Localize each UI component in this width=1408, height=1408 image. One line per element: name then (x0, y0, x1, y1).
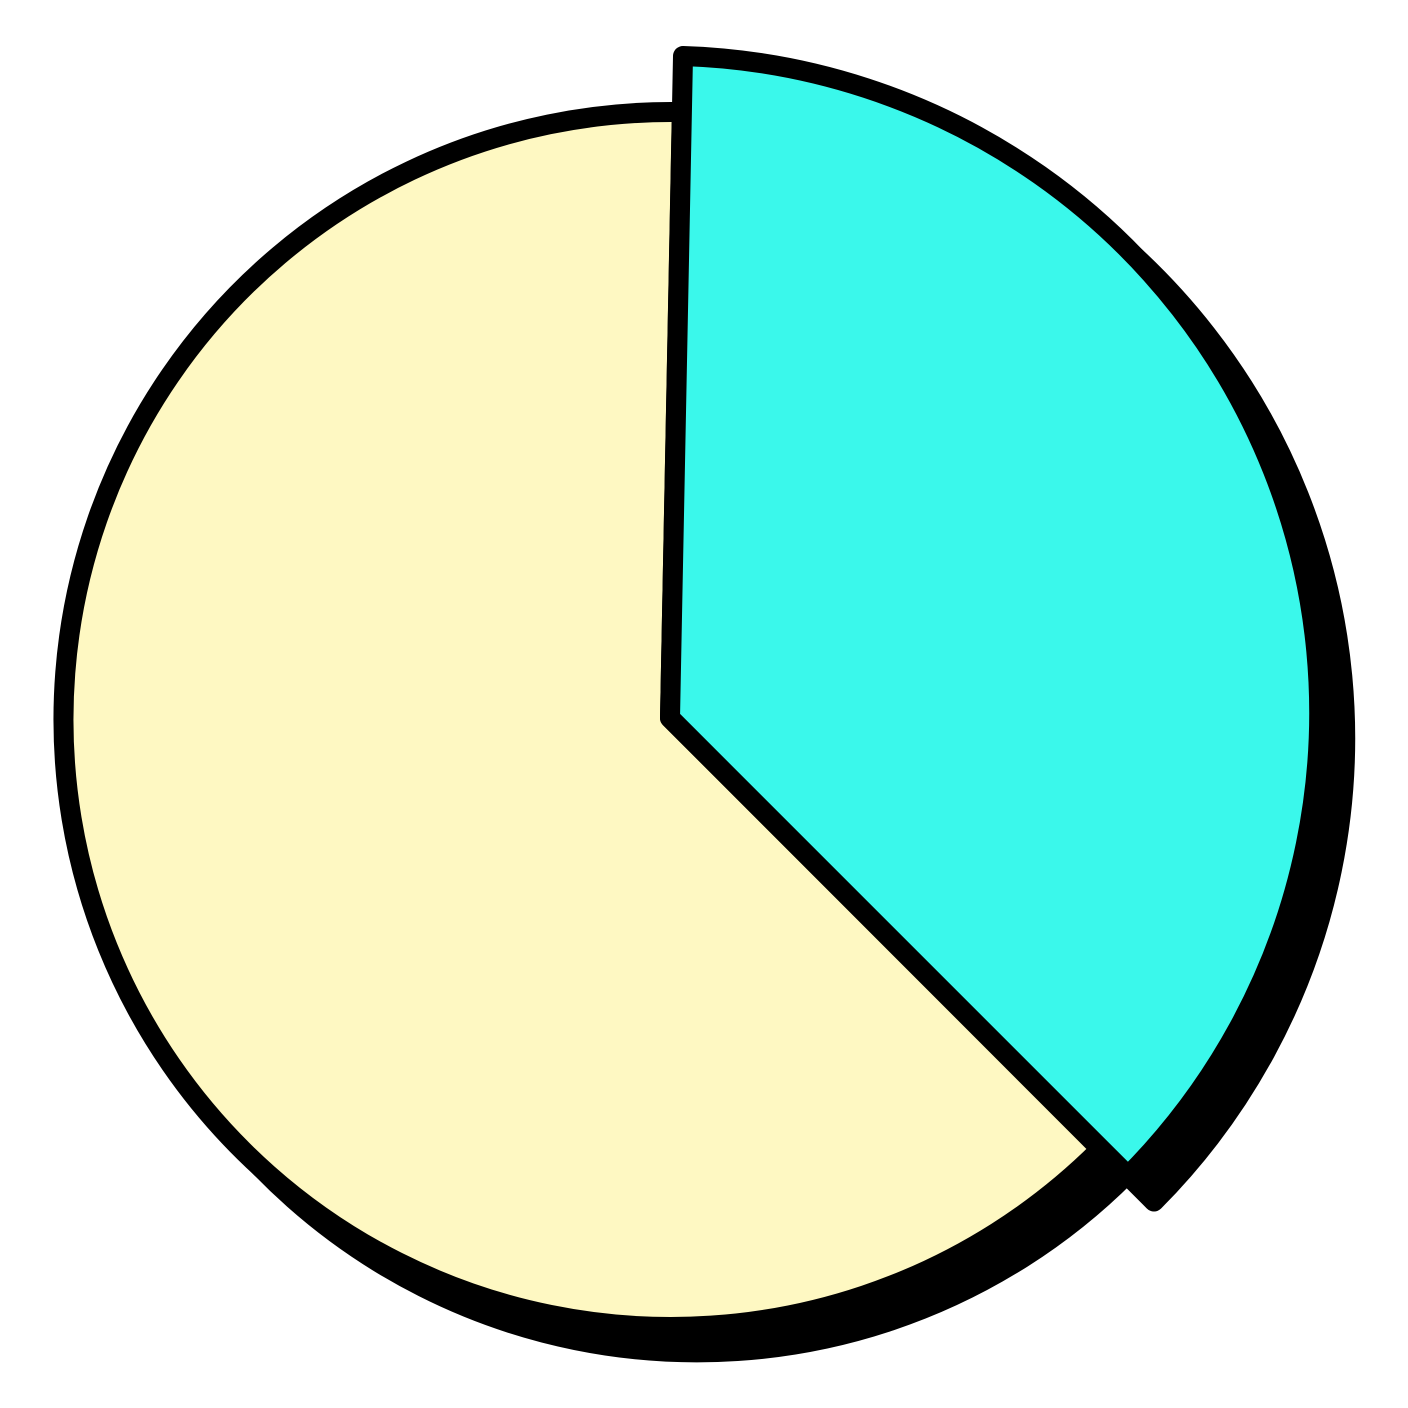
slice: large cream segment (63, 112, 1101, 1327)
slice: cyan segment, pulled out (670, 56, 1319, 1176)
